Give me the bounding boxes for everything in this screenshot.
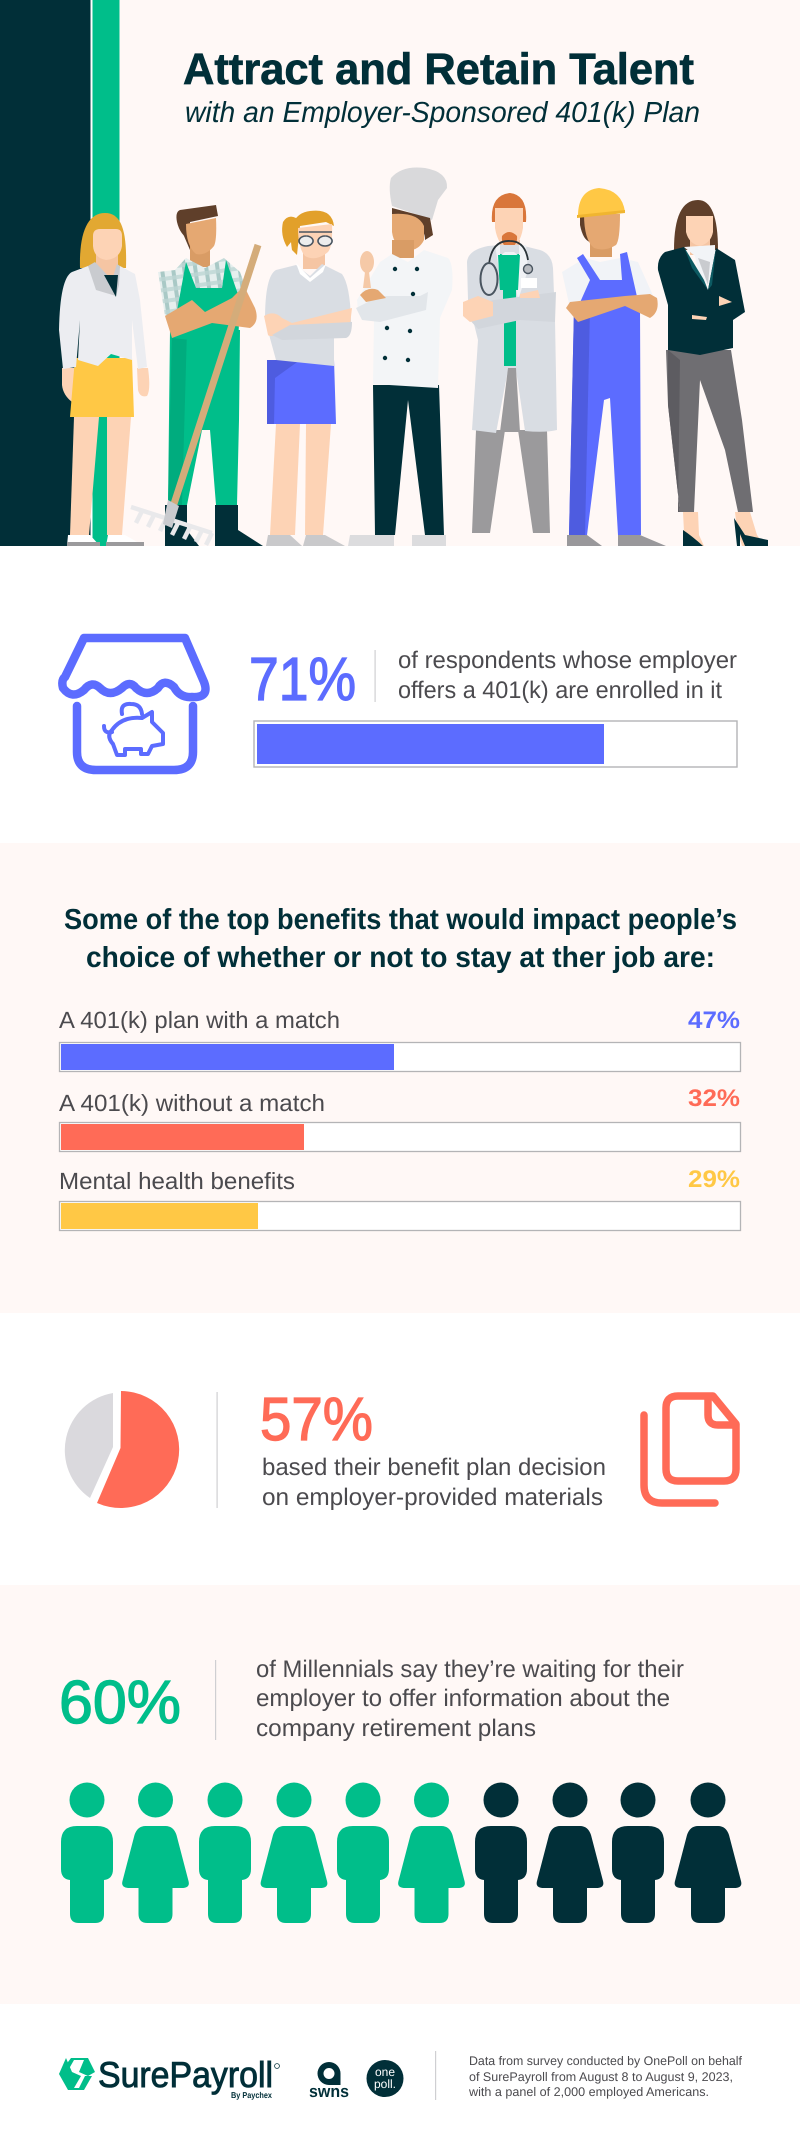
description text: of Millennials say they’re waiting for their: [256, 1656, 684, 1683]
panel: footer: [59, 2051, 743, 2101]
percent 60: 60%: [59, 1668, 181, 1736]
logo: one poll: [366, 2060, 404, 2097]
logo: swns: swns: [309, 2082, 349, 2101]
source note: Data from survey conducted by OnePoll on behalf: [469, 2054, 743, 2068]
row: mental health: 29%: [688, 1166, 740, 1193]
pie chart: [65, 1391, 179, 1508]
subtitle: with an Employer-Sponsored 401(k) Plan: [185, 97, 700, 129]
figure: construction worker: [562, 188, 666, 546]
row: mental health: [59, 1166, 740, 1230]
heading: choice of whether or not to stay at ther job are:: [86, 942, 715, 974]
figure: gardener with rake: [131, 205, 263, 546]
panel: 71 percent enrolled: [62, 638, 737, 770]
figure: businesswoman in dark suit: [658, 200, 768, 546]
progress bar 71: [254, 721, 737, 767]
panel: hero: [0, 0, 800, 546]
title: Attract and Retain Talent: [183, 45, 694, 94]
description text: of respondents whose employer: [398, 647, 737, 674]
figure: office worker with glasses: [264, 211, 352, 546]
figure: businesswoman in yellow skirt: [59, 213, 149, 546]
icon: storefront with piggy bank: [62, 638, 206, 770]
pictogram: 6 of 10 people: [61, 1782, 741, 1923]
percent 57: 57%: [260, 1385, 373, 1453]
panel: 60 percent millennials: [0, 1585, 800, 2004]
row: 401k with match: [59, 1007, 740, 1072]
logo: swns: [309, 2062, 349, 2101]
description text: employer to offer information about the: [256, 1685, 670, 1712]
row: 401k with match: 47%: [688, 1007, 740, 1034]
heading: Some of the top benefits that would impact people’s: [64, 904, 737, 936]
icon: documents: [644, 1396, 736, 1503]
row: 401k without match: [59, 1085, 740, 1152]
figure: doctor with stethoscope: [463, 193, 557, 533]
description text: company retirement plans: [256, 1715, 536, 1742]
panel: 57 percent materials: [65, 1385, 736, 1511]
source note: of SurePayroll from August 8 to August 9, 2023,: [469, 2070, 733, 2084]
description text: offers a 401(k) are enrolled in it: [398, 677, 722, 704]
source note: with a panel of 2,000 employed Americans.: [468, 2085, 709, 2099]
description text: based their benefit plan decision: [262, 1454, 606, 1481]
row: 401k with match: A 401(k) plan with a match: [59, 1007, 340, 1033]
logo: one poll: one: [375, 2065, 395, 2079]
logo: one poll: poll.: [374, 2077, 396, 2091]
description text: on employer-provided materials: [262, 1484, 603, 1511]
logo: SurePayroll: SurePayroll: [98, 2054, 273, 2095]
percent 71: 71%: [249, 645, 356, 713]
row: 401k without match: A 401(k) without a match: [59, 1090, 325, 1116]
panel: top benefits: [0, 843, 800, 1313]
figure: chef: [348, 167, 452, 546]
row: 401k without match: 32%: [688, 1085, 740, 1112]
row: mental health: Mental health benefits: [59, 1168, 295, 1194]
logo: SurePayroll: By Paychex: [231, 2090, 272, 2100]
